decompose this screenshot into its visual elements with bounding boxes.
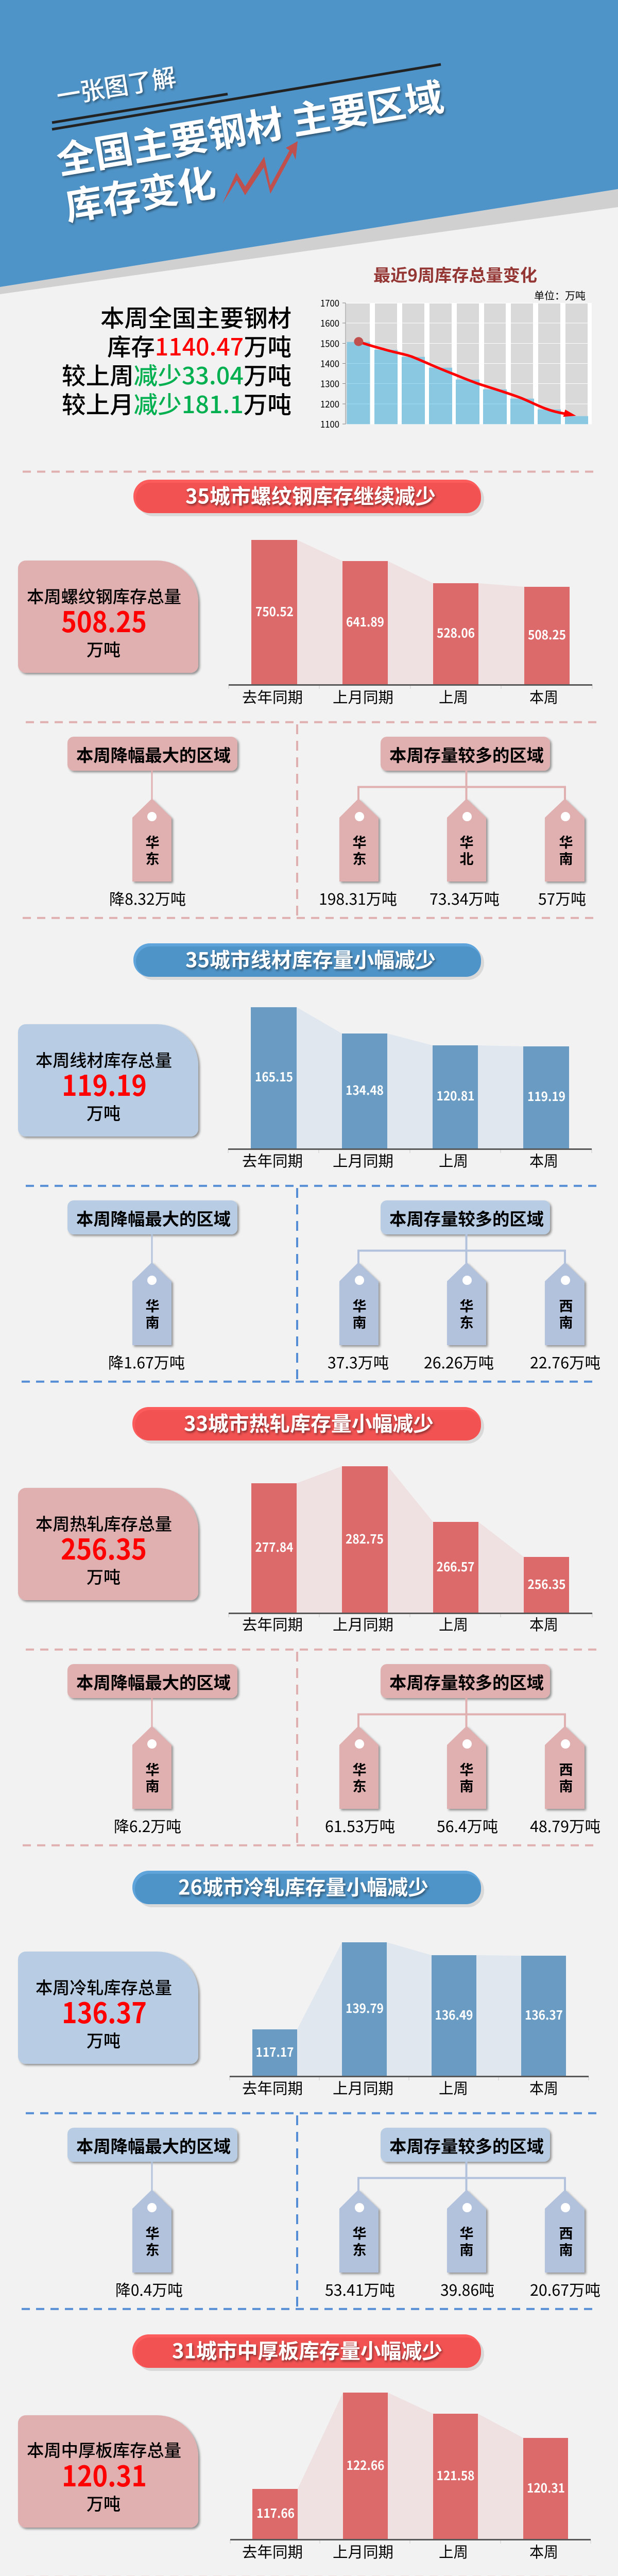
panel: largest decrease: 降8.32万吨 — [109, 887, 186, 909]
panel: largest stock: 73.34万吨 — [430, 887, 500, 909]
y axis: 1200 — [320, 397, 339, 411]
total card — [18, 1024, 198, 1137]
total card — [18, 1952, 198, 2064]
total card: 120.31 — [62, 2453, 147, 2495]
panel: largest stock: 华 — [352, 832, 367, 852]
section: medium-thick plate — [18, 2334, 600, 2576]
panel: largest stock: 东 — [352, 2239, 367, 2259]
bar chart: 上周 — [439, 686, 468, 707]
bar chart: 上月同期 — [333, 1613, 393, 1635]
y axis — [320, 296, 346, 431]
weekly summary text: 较上周减少33.04万吨 — [62, 358, 291, 392]
total card: 万吨 — [87, 1100, 121, 1125]
bar chart: 528.06 — [437, 623, 475, 641]
bar chart — [228, 1007, 592, 1171]
panel: largest stock: 华 — [352, 1295, 367, 1315]
panel: largest stock: 南 — [559, 2239, 573, 2259]
y axis: 1400 — [320, 357, 339, 370]
panel: largest stock: 华 — [559, 832, 573, 852]
total card: 119.19 — [62, 1063, 147, 1104]
panel: largest stock: 南 — [559, 848, 573, 868]
bar chart: 上月同期 — [333, 2540, 393, 2562]
trend arrow — [354, 337, 576, 417]
panel: largest decrease — [67, 737, 237, 909]
y axis: 1500 — [320, 337, 339, 350]
vertical divider — [296, 724, 298, 919]
plot area — [346, 303, 592, 425]
bar chart: 120.81 — [437, 1086, 475, 1104]
panel: largest stock: 22.76万吨 — [530, 1350, 600, 1373]
weekly summary text — [62, 300, 291, 420]
bar chart: 本周 — [529, 1149, 558, 1171]
panel: largest stock: 华 — [352, 1759, 367, 1779]
panel: largest stock: 北 — [459, 848, 474, 868]
panel: largest decrease: 本周降幅最大的区域 — [76, 742, 231, 767]
vertical divider — [296, 2115, 298, 2310]
panel: largest stock: 本周存量较多的区域 — [389, 1669, 544, 1694]
bar chart: 256.35 — [527, 1574, 565, 1592]
section heading pill — [133, 943, 484, 980]
panel: largest stock: 39.86吨 — [440, 2278, 494, 2300]
bar chart: 上周 — [439, 2540, 468, 2562]
bar chart: 277.84 — [255, 1537, 294, 1555]
bar chart: 136.49 — [435, 2005, 473, 2023]
bar chart: 122.66 — [346, 2455, 384, 2473]
panel: largest stock: 南 — [459, 2239, 474, 2259]
total card: 本周螺纹钢库存总量 — [27, 583, 181, 608]
bar chart: 去年同期 — [242, 2077, 303, 2098]
panel: largest stock: 本周存量较多的区域 — [389, 2133, 544, 2158]
bar chart: 上周 — [439, 1149, 468, 1171]
panel: largest stock: 华 — [459, 1759, 474, 1779]
weekly summary text: 较上月减少181.1万吨 — [62, 386, 291, 420]
panel: largest stock — [325, 2128, 600, 2300]
total card — [18, 561, 198, 673]
panel: largest stock — [319, 737, 586, 909]
bar chart: 本周 — [529, 686, 558, 707]
panel: largest stock: 57万吨 — [538, 887, 586, 909]
panel: largest stock: 西 — [559, 1295, 573, 1315]
dashed dividers — [23, 722, 596, 918]
panel: largest stock: 61.53万吨 — [325, 1814, 395, 1837]
bar chart: 上月同期 — [333, 1149, 393, 1171]
panel: largest stock: 南 — [352, 1312, 367, 1332]
bar chart: 136.37 — [525, 2005, 563, 2023]
total card: 136.37 — [62, 1990, 147, 2031]
section heading pill — [133, 480, 484, 516]
bar chart: 282.75 — [346, 1529, 384, 1547]
total card: 万吨 — [87, 1564, 121, 1588]
chart title: 最近9周库存总量变化 — [373, 262, 537, 286]
panel: largest stock: 东 — [352, 1775, 367, 1795]
panel: largest decrease: 南 — [145, 1775, 160, 1795]
panel: largest stock: 56.4万吨 — [437, 1814, 498, 1837]
section: cold rolled — [18, 1871, 600, 2310]
bar chart: 117.66 — [256, 2503, 295, 2521]
panel: largest stock: 华 — [459, 832, 474, 852]
total card: 本周热轧库存总量 — [36, 1511, 172, 1535]
panel: largest stock: 西 — [559, 2223, 573, 2243]
main title — [52, 67, 447, 232]
section heading pill — [132, 2334, 484, 2371]
panel: largest stock: 东 — [459, 1312, 474, 1332]
panel: largest stock: 南 — [559, 1775, 573, 1795]
bar chart: 上月同期 — [333, 686, 393, 707]
bar chart: 去年同期 — [242, 1613, 303, 1635]
y axis: 1600 — [320, 316, 339, 330]
panel: largest decrease — [67, 1664, 237, 1837]
total card — [18, 2415, 198, 2528]
panel: largest decrease: 降0.4万吨 — [115, 2278, 183, 2300]
dashed dividers — [22, 2113, 596, 2309]
total card: 256.35 — [61, 1527, 147, 1568]
panel: largest decrease: 本周降幅最大的区域 — [76, 1206, 231, 1230]
panel: largest decrease — [67, 1200, 237, 1373]
divider: top of rebar section — [23, 471, 593, 473]
panel: largest decrease: 降1.67万吨 — [108, 1350, 185, 1373]
bar chart: 117.17 — [255, 2042, 294, 2060]
kicker: 一张图了解: 一张图了解 — [54, 57, 178, 112]
panel: largest stock: 53.41万吨 — [325, 2278, 395, 2300]
panel: largest decrease: 华 — [145, 2223, 160, 2243]
panel: largest decrease: 南 — [145, 1312, 160, 1332]
section heading pill: 31城市中厚板库存量小幅减少 — [172, 2335, 442, 2365]
panel: largest decrease: 华 — [145, 832, 160, 852]
bar chart — [229, 540, 592, 707]
dashed dividers — [22, 1186, 596, 1382]
panel: largest stock: 198.31万吨 — [319, 887, 397, 909]
bar chart: 134.48 — [346, 1080, 384, 1098]
header banner — [0, 0, 618, 294]
total card: 万吨 — [87, 2490, 121, 2515]
weekly summary text: 库存1140.47万吨 — [107, 329, 291, 363]
chart: last 9 weeks total inventory — [320, 262, 592, 431]
bar chart: 121.58 — [437, 2466, 475, 2484]
vertical divider — [296, 1652, 298, 1846]
panel: largest stock: 本周存量较多的区域 — [389, 742, 544, 767]
section: hot rolled — [18, 1407, 600, 1846]
bar chart: 去年同期 — [242, 686, 303, 707]
total card: 本周中厚板库存总量 — [27, 2437, 181, 2462]
panel: largest stock: 本周存量较多的区域 — [389, 1206, 544, 1230]
panel: largest stock: 20.67万吨 — [530, 2278, 600, 2300]
unit label: 单位：万吨 — [534, 287, 586, 302]
panel: largest stock — [325, 1664, 600, 1837]
panel: largest stock: 48.79万吨 — [530, 1814, 600, 1837]
bar chart: 本周 — [529, 1613, 558, 1635]
panel: largest decrease: 东 — [145, 848, 160, 868]
section heading pill: 35城市线材库存量小幅减少 — [185, 944, 436, 974]
panel: largest decrease: 东 — [145, 2239, 160, 2259]
section heading pill: 26城市冷轧库存量小幅减少 — [178, 1871, 428, 1901]
weekly summary text: 本周全国主要钢材 — [100, 300, 291, 334]
total card: 万吨 — [87, 636, 121, 661]
vertical divider — [296, 1188, 298, 1383]
panel: largest decrease: 降6.2万吨 — [114, 1814, 181, 1837]
y axis: 1700 — [320, 296, 339, 310]
panel: largest stock — [328, 1200, 600, 1373]
bar chart: 上周 — [439, 2077, 468, 2098]
total card: 本周线材库存总量 — [36, 1047, 172, 1072]
panel: largest decrease: 本周降幅最大的区域 — [76, 2133, 231, 2158]
main title: 全国主要钢材 主要区域 — [52, 67, 447, 185]
panel: largest stock: 26.26万吨 — [424, 1350, 494, 1373]
bar chart: 641.89 — [346, 612, 384, 630]
section heading pill — [132, 1871, 484, 1907]
panel: largest stock: 华 — [459, 1295, 474, 1315]
section: rebar — [18, 480, 596, 919]
bar chart: 266.57 — [437, 1557, 475, 1575]
panel: largest stock: 西 — [559, 1759, 573, 1779]
y axis: 1300 — [320, 377, 339, 391]
panel: largest decrease: 华 — [145, 1295, 160, 1315]
panel: largest stock: 南 — [459, 1775, 474, 1795]
main title: 库存变化 — [60, 152, 219, 232]
bar chart: 139.79 — [346, 1998, 384, 2016]
bar chart: 750.52 — [255, 602, 294, 620]
bar chart: 508.25 — [528, 625, 566, 643]
bar chart: 119.19 — [527, 1087, 565, 1105]
total card: 本周冷轧库存总量 — [36, 1974, 172, 1999]
bar chart: 本周 — [529, 2540, 558, 2562]
panel: largest decrease: 本周降幅最大的区域 — [76, 1669, 231, 1694]
panel: largest stock: 华 — [459, 2223, 474, 2243]
bar chart: 上周 — [439, 1613, 468, 1635]
panel: largest stock: 37.3万吨 — [328, 1350, 389, 1373]
bar chart — [230, 1942, 589, 2098]
dashed dividers — [23, 1650, 596, 1845]
panel: largest stock: 华 — [352, 2223, 367, 2243]
bar chart — [230, 2393, 591, 2562]
bar chart: 120.31 — [527, 2478, 565, 2496]
panel: largest decrease — [67, 2128, 237, 2300]
bar chart: 去年同期 — [242, 2540, 303, 2562]
bar chart: 165.15 — [255, 1067, 293, 1085]
bar chart — [229, 1466, 592, 1635]
panel: largest stock: 东 — [352, 848, 367, 868]
icon: rising zigzag arrow — [222, 141, 298, 204]
bar chart: 本周 — [529, 2077, 558, 2098]
total card — [18, 1488, 198, 1600]
total card: 万吨 — [87, 2027, 121, 2052]
section heading pill: 35城市螺纹钢库存继续减少 — [185, 480, 436, 510]
section: wire rod — [18, 943, 600, 1383]
y axis: 1100 — [320, 417, 339, 431]
section heading pill: 33城市热轧库存量小幅减少 — [184, 1408, 434, 1437]
panel: largest decrease: 华 — [145, 1759, 160, 1779]
section heading pill — [132, 1407, 484, 1444]
bar chart: 去年同期 — [242, 1149, 303, 1171]
total card: 508.25 — [61, 599, 147, 640]
bar chart: 上月同期 — [333, 2077, 393, 2098]
panel: largest stock: 南 — [559, 1312, 573, 1332]
